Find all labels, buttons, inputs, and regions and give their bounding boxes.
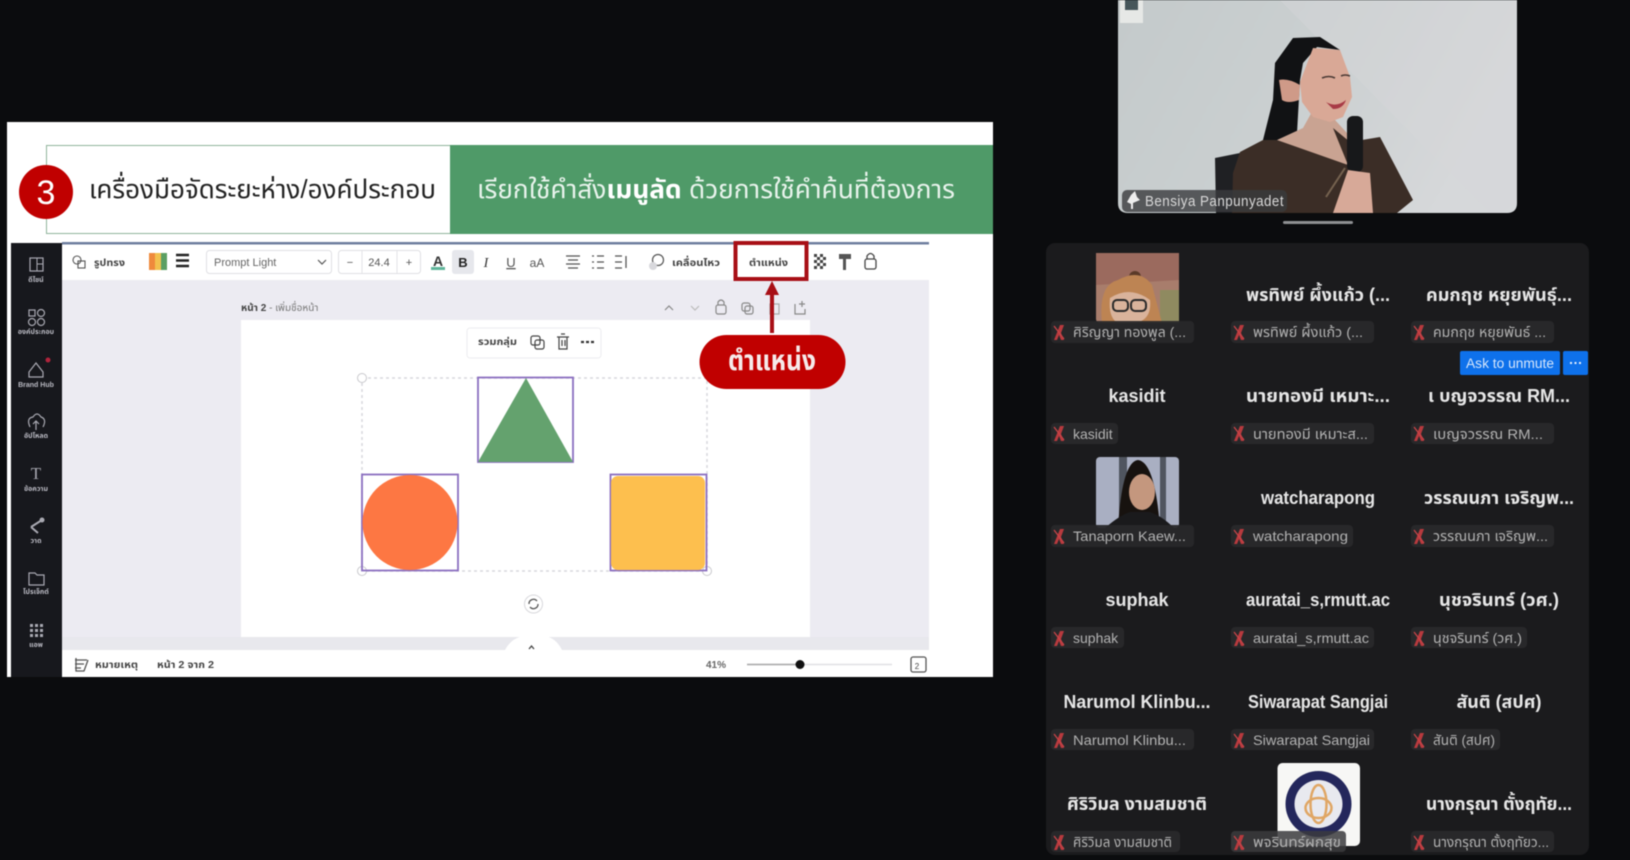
transparency icon bbox=[814, 254, 826, 269]
panel: presentation slide bbox=[7, 122, 993, 677]
label: kasidit: kasidit bbox=[1073, 426, 1113, 442]
triangle shape bbox=[478, 378, 573, 462]
step number badge bbox=[19, 165, 73, 219]
sidebar item: brand hub bbox=[18, 358, 54, 389]
more options button bbox=[1563, 351, 1588, 375]
row 5: Narumol Klinbu... bbox=[1064, 692, 1210, 712]
font selector bbox=[206, 250, 332, 274]
zoom slider bbox=[747, 660, 892, 669]
editor sidebar bbox=[11, 243, 62, 677]
label: suphak: suphak bbox=[1073, 630, 1119, 646]
row 6: นางกรุณา ตั้งฤทัย... bbox=[1426, 792, 1572, 815]
label: santi bbox=[1411, 729, 1500, 750]
label: sirivimon: ศิริวิมล งามสมชาติ bbox=[1073, 834, 1172, 850]
sidebar item: elements bbox=[18, 310, 54, 336]
row 4: นุชจรินทร์ (วศ.) bbox=[1439, 590, 1559, 611]
label: komkrit bbox=[1411, 321, 1554, 343]
row 3 bbox=[1260, 488, 1574, 508]
page count: หน้า 2 จาก 2 bbox=[157, 658, 214, 671]
drag handle bbox=[1283, 221, 1353, 224]
label: benjawan bbox=[1411, 423, 1554, 444]
row 4: suphak bbox=[1105, 590, 1169, 610]
notes: หมายเหตุ bbox=[95, 660, 138, 671]
heading text: เครื่องมือจัดระยะห่าง/องค์ประกอบ bbox=[89, 171, 436, 204]
sidebar item: brand hub: Brand Hub bbox=[18, 382, 54, 389]
label: watcharapong: watcharapong bbox=[1252, 528, 1348, 544]
label: santi: สันติ (สปศ) bbox=[1433, 732, 1495, 748]
bold button bbox=[452, 250, 474, 274]
page grid button: 2 bbox=[915, 662, 920, 671]
presenter bbox=[1232, 37, 1413, 213]
shape tool bbox=[73, 256, 125, 269]
sidebar item: text: ข้อความ bbox=[24, 485, 48, 493]
align icons bbox=[566, 256, 626, 268]
sidebar item: draw: วาด bbox=[30, 538, 42, 545]
editor workspace bbox=[62, 280, 929, 650]
label: wannapa bbox=[1411, 525, 1554, 547]
eyes and mouth bbox=[1322, 75, 1350, 78]
label: kasidit bbox=[1051, 423, 1118, 444]
font size stepper: − bbox=[347, 257, 353, 269]
label: siwarapat: Siwarapat Sangjai bbox=[1253, 732, 1370, 748]
label: benjawan: เบญจวรรณ RM... bbox=[1433, 426, 1543, 442]
pages drawer tab bbox=[505, 636, 562, 650]
italic: I bbox=[483, 256, 490, 271]
label: karuna bbox=[1411, 831, 1554, 852]
neck and chest bbox=[1277, 110, 1350, 168]
sidebar item: text: T bbox=[31, 464, 42, 483]
label: sirinya bbox=[1051, 321, 1194, 343]
sidebar item: apps bbox=[29, 624, 43, 649]
sidebar item: design: ดีไซน์ bbox=[28, 276, 44, 284]
tile names bbox=[1064, 282, 1574, 815]
font size stepper: + bbox=[406, 257, 412, 269]
tile labels column 3 bbox=[1411, 321, 1554, 852]
tile labels column 2 bbox=[1231, 321, 1374, 852]
zoom percentage: 41% bbox=[706, 660, 726, 671]
label: pojarin bbox=[1231, 831, 1346, 852]
label: pornthip bbox=[1231, 321, 1374, 343]
label: tanaporn bbox=[1051, 525, 1194, 547]
row 6: ศิริวิมล งามสมชาติ bbox=[1067, 794, 1207, 814]
speaker name label bbox=[1122, 190, 1287, 212]
label: pojarin: พจรินทร์ผกสุข bbox=[1253, 834, 1341, 851]
letter case: aA bbox=[530, 256, 544, 270]
label: siwarapat bbox=[1231, 729, 1374, 750]
row 2: kasidit bbox=[1108, 386, 1166, 406]
paint roller icon bbox=[839, 254, 851, 270]
label: narumol: Narumol Klinbu... bbox=[1073, 732, 1186, 748]
text colour bbox=[431, 253, 445, 270]
tile labels column 1 bbox=[1051, 321, 1194, 852]
ask to unmute button: Ask to unmute bbox=[1466, 356, 1554, 371]
hand bbox=[1333, 170, 1373, 213]
lock icon bbox=[865, 254, 876, 269]
row 5 bbox=[1064, 692, 1542, 712]
canvas page bbox=[241, 320, 810, 637]
sidebar item: draw bbox=[30, 518, 44, 545]
animate button bbox=[649, 254, 720, 270]
red highlight box bbox=[736, 243, 806, 279]
floating selection toolbar bbox=[467, 328, 601, 358]
callout: position bbox=[700, 335, 846, 389]
row 2 bbox=[1108, 386, 1570, 406]
editor top toolbar bbox=[62, 242, 929, 280]
label: karuna: นางกรุณา ตั้งฤทัยว... bbox=[1433, 833, 1549, 851]
avatar: university logo bbox=[1278, 763, 1360, 846]
label: auratai: auratai_s,rmutt.ac bbox=[1253, 630, 1369, 646]
label: suphak bbox=[1051, 627, 1124, 648]
panel: participants gallery bbox=[1046, 243, 1589, 855]
floating selection toolbar: รวมกลุ่ม bbox=[478, 335, 517, 348]
position button: ตำแหน่ง bbox=[749, 256, 788, 269]
page title: หน้า 2 - เพิ่มชื่อหน้า bbox=[241, 300, 318, 314]
panel: speaker video bbox=[1118, 0, 1517, 213]
speaker name label: Bensiya Panpunyadet bbox=[1145, 194, 1284, 210]
sidebar item: text bbox=[24, 464, 48, 493]
rotate handle bbox=[524, 595, 542, 613]
circle shape bbox=[362, 474, 458, 570]
sidebar item: uploads bbox=[24, 414, 48, 440]
sidebar item: design bbox=[28, 258, 44, 284]
sidebar item: elements: องค์ประกอบ bbox=[18, 328, 54, 336]
font selector: Prompt Light bbox=[214, 257, 276, 269]
shape tool: รูปทรง bbox=[94, 258, 125, 269]
label: tanaporn: Tanaporn Kaew... bbox=[1073, 528, 1186, 544]
row 4: auratai_s,rmutt.ac bbox=[1246, 590, 1390, 610]
red arrow bbox=[765, 281, 779, 333]
label: watcharapong bbox=[1231, 525, 1353, 547]
row 1: คมกฤช หยุยพันธุ์... bbox=[1426, 285, 1572, 306]
underline: U bbox=[506, 255, 516, 270]
notes bbox=[75, 658, 138, 671]
row 6 bbox=[1067, 792, 1572, 815]
microphone bbox=[1347, 116, 1363, 172]
row 3: วรรณนภา เจริญพ... bbox=[1424, 488, 1574, 508]
label: nutcharin bbox=[1411, 627, 1527, 648]
ear bbox=[1279, 80, 1300, 102]
bold button: B bbox=[458, 255, 468, 270]
label: thongmee: นายทองมี เหมาะส... bbox=[1253, 426, 1368, 442]
chair bbox=[1215, 153, 1240, 213]
row 1: พรทิพย์ ผึ้งแก้ว (... bbox=[1246, 282, 1390, 305]
row 1 bbox=[1246, 282, 1572, 306]
row 3: watcharapong bbox=[1260, 488, 1375, 508]
row 5: สันติ (สปศ) bbox=[1456, 692, 1542, 712]
row 5: Siwarapat Sangjai bbox=[1248, 692, 1388, 712]
label: auratai bbox=[1231, 627, 1374, 648]
label: narumol bbox=[1051, 729, 1194, 750]
slide heading bar bbox=[19, 145, 993, 234]
label: pornthip: พรทิพย์ ผึ้งแก้ว (... bbox=[1253, 322, 1363, 340]
label: sirivimon bbox=[1051, 831, 1180, 852]
label: wannapa: วรรณนภา เจริญพ... bbox=[1433, 528, 1548, 544]
avatar: woman with glasses bbox=[1096, 253, 1179, 323]
font size stepper: 24.4 bbox=[368, 257, 390, 269]
face bbox=[1300, 48, 1352, 122]
row 2: นายทองมี เหมาะ... bbox=[1246, 386, 1390, 406]
step number badge: 3 bbox=[37, 174, 55, 212]
avatar: woman long hair bbox=[1096, 457, 1179, 528]
label: nutcharin: นุชจรินทร์ (วศ.) bbox=[1433, 630, 1522, 647]
heading instruction: เรียกใช้คำสั่งเมนูลัด ด้วยการใช้คำค้นที่ต้องการ bbox=[477, 171, 955, 205]
page grid button bbox=[911, 657, 926, 672]
sidebar item: projects bbox=[23, 573, 49, 596]
text colour: A bbox=[433, 253, 443, 269]
ask to unmute button bbox=[1460, 351, 1560, 375]
editor bottom bar bbox=[62, 650, 929, 677]
page controls bbox=[665, 300, 805, 314]
group selection outline bbox=[358, 374, 712, 576]
sidebar item: projects: โปรเจ็กต์ bbox=[23, 588, 49, 596]
callout: position: ตำแหน่ง bbox=[728, 345, 816, 376]
label: komkrit: คมกฤช หยุยพันธ์ ... bbox=[1433, 324, 1546, 341]
colour swatch bbox=[149, 253, 167, 270]
font size stepper bbox=[338, 250, 420, 274]
wall switch bbox=[1120, 0, 1143, 23]
label: sirinya: ศิริญญา ทองพูล (... bbox=[1073, 324, 1186, 341]
dress bbox=[1232, 128, 1413, 213]
hair bbox=[1263, 37, 1340, 140]
sidebar item: apps: แอพ bbox=[29, 642, 43, 649]
row 2: เ บญจวรรณ RM... bbox=[1428, 386, 1570, 406]
square shape bbox=[610, 474, 706, 570]
label: thongmee bbox=[1231, 423, 1374, 444]
row 4 bbox=[1105, 590, 1559, 611]
line style bbox=[176, 255, 189, 266]
sidebar item: uploads: อัปโหลด bbox=[24, 432, 48, 440]
animate button: เคลื่อนไหว bbox=[672, 255, 720, 269]
